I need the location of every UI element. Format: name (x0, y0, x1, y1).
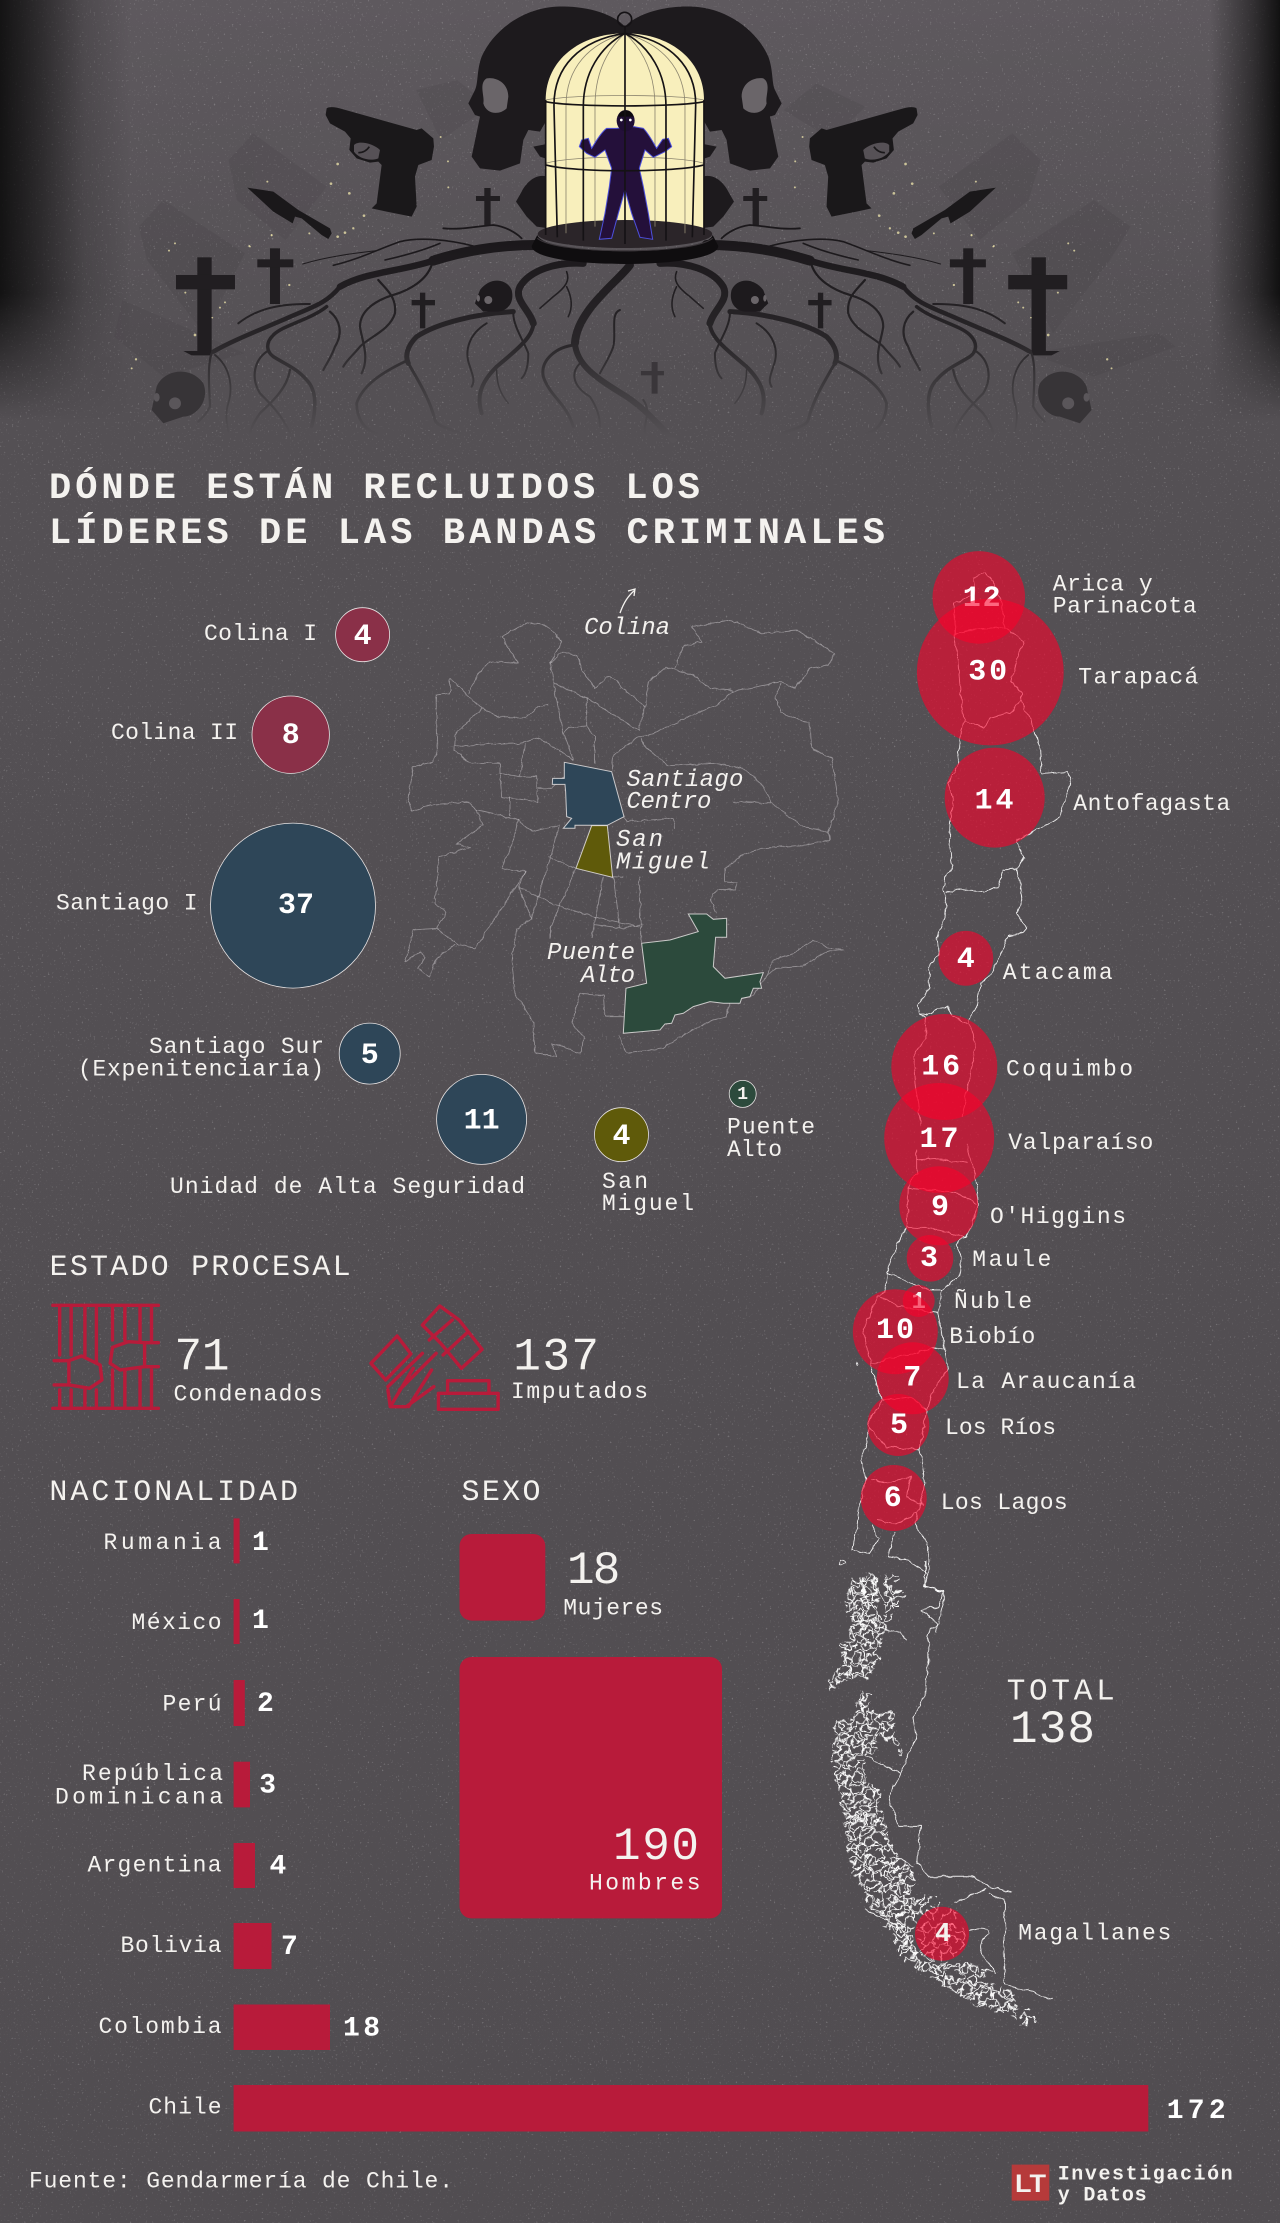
panel: hombres: 190 (613, 1821, 699, 1873)
prison: Santiago I (56, 823, 376, 988)
region: Coquimbo: 16 (921, 1051, 960, 1085)
region: Los Lagos: Los Lagos (941, 1490, 1068, 1516)
bar: México: México (132, 1610, 222, 1636)
icon: small skull (475, 281, 512, 312)
logo: LT Investigación y Datos: Investigación (1058, 2163, 1233, 2186)
bar: Bolivia (120, 1923, 298, 1969)
bar: Colombia (98, 2004, 380, 2050)
region: Atacama (938, 931, 1113, 986)
panel: imputados: Imputados (511, 1379, 648, 1405)
panel: imputados: 137 (513, 1331, 599, 1383)
bar: Chile: 172 (1167, 2096, 1226, 2127)
back bars (546, 33, 704, 233)
panel: mujeres: 18 (567, 1545, 620, 1597)
bar: Argentina: Argentina (88, 1852, 222, 1878)
cage floor (538, 220, 712, 248)
region: Biobío: Biobío (949, 1324, 1035, 1350)
region: Maule: 3 (920, 1242, 938, 1276)
comuna outlines (405, 620, 843, 1057)
title: LÍDERES DE LAS BANDAS CRIMINALES (49, 512, 885, 555)
bar: República Dominicana: Dominicana (55, 1784, 223, 1810)
region: Maule (907, 1235, 1051, 1282)
region: Coquimbo (891, 1014, 1133, 1120)
region: O'Higgins: 9 (931, 1191, 949, 1225)
icon: jail bars with hands (53, 1305, 158, 1408)
region: La Araucanía (877, 1342, 1136, 1414)
chile map (827, 571, 1072, 2027)
region: La Araucanía: 7 (903, 1361, 921, 1395)
faded chevron shapes (114, 80, 1175, 377)
bar: Rumania (104, 1518, 269, 1563)
icon: crosses (176, 188, 500, 355)
region outlines (840, 571, 1072, 2000)
region: Maule: Maule (972, 1247, 1051, 1273)
total (1007, 1675, 1115, 1756)
map labels: Centro (626, 789, 711, 816)
prisoner (579, 110, 672, 239)
prison: Santiago I: Santiago I (56, 891, 198, 917)
region: Ñuble (903, 1285, 1032, 1317)
region: Valparaíso: 17 (920, 1123, 958, 1157)
bar: República Dominicana (55, 1761, 276, 1810)
hero illustration: cage, skulls, weapons and roots (114, 6, 1175, 440)
prison: Santiago Sur: (Expenitenciaría) (78, 1056, 324, 1082)
santiago centro area (552, 762, 624, 828)
cage base (532, 235, 718, 264)
right half: mirrored weapons and roots (660, 107, 1113, 433)
bar: México: 1 (252, 1606, 269, 1637)
bar: Rumania: Rumania (104, 1530, 222, 1556)
total: 138 (1010, 1704, 1095, 1756)
panel: mujeres (460, 1534, 663, 1622)
panel: condenados: Condenados (174, 1381, 322, 1407)
prison: Unidad de Alta Seguridad (170, 1074, 527, 1200)
region: Los Lagos: 6 (884, 1482, 902, 1516)
sparks (131, 234, 290, 369)
region: Arica y Parinacota: Arica y (1053, 572, 1153, 598)
icon: gun (326, 107, 434, 217)
region: Antofagasta: Antofagasta (1073, 791, 1230, 817)
prison: Colina II (111, 696, 329, 773)
title: DÓNDE ESTÁN RECLUIDOS LOS (49, 466, 700, 510)
region: Tarapacá: 30 (968, 655, 1007, 689)
region: La Araucanía: La Araucanía (956, 1369, 1136, 1395)
heading: sexo: SEXO (462, 1476, 540, 1510)
region: Los Ríos (867, 1394, 1056, 1456)
skull shadows behind the cage (468, 6, 782, 228)
region: Valparaíso (884, 1083, 1153, 1193)
sparks (248, 136, 449, 247)
prison: Santiago Sur: Santiago Sur (149, 1034, 324, 1060)
bar: Perú: Perú (162, 1691, 222, 1717)
region: Magallanes: Magallanes (1018, 1920, 1171, 1946)
aysen fjords texture (827, 1573, 903, 1820)
panel: imputados (371, 1306, 648, 1409)
bar: Chile: Chile (148, 2094, 222, 2120)
region: Ñuble: 1 (911, 1289, 926, 1316)
prison: San Miguel: Miguel (602, 1191, 694, 1217)
north regions outline (913, 571, 1072, 1126)
prison: Santiago I: 37 (278, 889, 314, 923)
santiago map (405, 620, 843, 1057)
region: Atacama: 4 (957, 943, 975, 977)
panel: mujeres: Mujeres (563, 1595, 663, 1621)
bar: Perú: 2 (257, 1689, 274, 1720)
map labels: Puente (547, 940, 635, 967)
bar: Rumania: 1 (252, 1528, 269, 1559)
fjords texture (827, 1570, 1038, 2027)
region: Magallanes: 4 (935, 1920, 951, 1950)
heading: estado procesal: ESTADO PROCESAL (50, 1251, 351, 1285)
title (49, 466, 885, 555)
bar: Argentina (88, 1843, 286, 1888)
region: Magallanes (915, 1907, 1171, 1961)
front bars (546, 12, 704, 244)
map labels: Santiago (626, 767, 743, 794)
region: O'Higgins (899, 1166, 1126, 1245)
map labels: Colina (584, 615, 670, 642)
prison: Colina II: 8 (282, 719, 300, 753)
icon: faded skull (152, 372, 205, 423)
prison: Santiago Sur: 5 (361, 1039, 379, 1073)
region: Los Ríos: Los Ríos (945, 1415, 1056, 1441)
prison: Puente Alto: Alto (727, 1137, 782, 1163)
icon: gavel and hand (371, 1306, 498, 1409)
region: Atacama: Atacama (1003, 960, 1113, 986)
map labels: San (616, 827, 663, 854)
region: Biobío (853, 1289, 1035, 1374)
cage with prisoner (532, 12, 718, 264)
prison: Colina II: Colina II (111, 720, 238, 746)
prison: Puente Alto: 1 (737, 1085, 748, 1105)
chiloe texture (850, 1570, 902, 1630)
logo: LT Investigación y Datos: LT (1015, 2170, 1046, 2198)
bar: Argentina: 4 (270, 1851, 286, 1882)
region: Antofagasta (945, 748, 1230, 848)
region: Tarapacá (917, 599, 1198, 745)
bar: México (132, 1599, 269, 1644)
logo: LT Investigación y Datos (1012, 2163, 1233, 2207)
prison: Colina I (204, 608, 390, 662)
region: O'Higgins: O'Higgins (990, 1204, 1126, 1230)
source: Fuente: Gendarmería de Chile. (29, 2168, 453, 2194)
panel: hombres: Hombres (589, 1870, 700, 1896)
gun, knife and sparks (247, 107, 449, 247)
bar: República Dominicana: 3 (259, 1771, 276, 1802)
bar: Perú (162, 1680, 274, 1726)
region: Los Lagos (861, 1465, 1068, 1531)
prison: Colina I: 4 (354, 620, 372, 654)
prison: Unidad de Alta Seguridad: Unidad de Alta Seguridad (170, 1174, 525, 1200)
logo: LT Investigación y Datos: y Datos (1058, 2184, 1147, 2207)
region: Arica y Parinacota: 12 (963, 582, 1001, 616)
region: Arica y Parinacota: Parinacota (1053, 593, 1197, 619)
map labels: Alto (579, 963, 635, 990)
icon: knife (247, 188, 332, 239)
region: Ñuble: Ñuble (954, 1288, 1032, 1315)
panel: condenados (53, 1305, 322, 1408)
prison: Puente Alto (727, 1080, 815, 1163)
arrow to colina (620, 589, 635, 613)
central roots and cross (543, 265, 673, 440)
bar: Bolivia: Bolivia (120, 1933, 222, 1959)
prison: Colina I: Colina I (204, 621, 317, 647)
total: TOTAL (1007, 1675, 1115, 1710)
san miguel area (576, 826, 613, 877)
bar: Colombia: 18 (343, 2013, 380, 2044)
bar: Chile (148, 2085, 1226, 2132)
region: Biobío: 10 (876, 1314, 914, 1348)
puente alto area (623, 914, 763, 1033)
roots (198, 225, 583, 433)
prison: San Miguel: San (602, 1169, 648, 1195)
cage glow (546, 33, 704, 235)
panel: hombres (460, 1657, 722, 1918)
region: Valparaíso: Valparaíso (1008, 1130, 1153, 1156)
bar chart: nacionalidad (55, 1518, 1226, 2132)
magallanes fjords texture (843, 1809, 1038, 2027)
prison: San Miguel (594, 1108, 694, 1217)
bar: República Dominicana: República (82, 1761, 223, 1787)
map labels: Miguel (616, 849, 710, 876)
central and southern regions outline (840, 1143, 978, 1633)
heading: nacionalidad: NACIONALIDAD (49, 1476, 298, 1510)
left half: gun, knife, crosses, roots (131, 107, 583, 433)
bar: Bolivia: 7 (281, 1932, 298, 1963)
prison: Puente Alto: Puente (727, 1114, 815, 1140)
region: Coquimbo: Coquimbo (1006, 1056, 1133, 1082)
bar: Colombia: Colombia (98, 2014, 222, 2040)
prison: San Miguel: 4 (612, 1120, 631, 1154)
patagonia regions outline (863, 1560, 1052, 2000)
prison: Santiago Sur (78, 1023, 400, 1084)
region: Arica y Parinacota (932, 551, 1197, 644)
region: Tarapacá: Tarapacá (1078, 665, 1198, 691)
map labels (547, 615, 743, 990)
region: Los Ríos: 5 (890, 1409, 908, 1443)
prison: Unidad de Alta Seguridad: 11 (464, 1104, 500, 1138)
region: Antofagasta: 14 (974, 785, 1014, 819)
panel: condenados: 71 (174, 1331, 230, 1383)
hero vignette (0, 0, 1280, 420)
